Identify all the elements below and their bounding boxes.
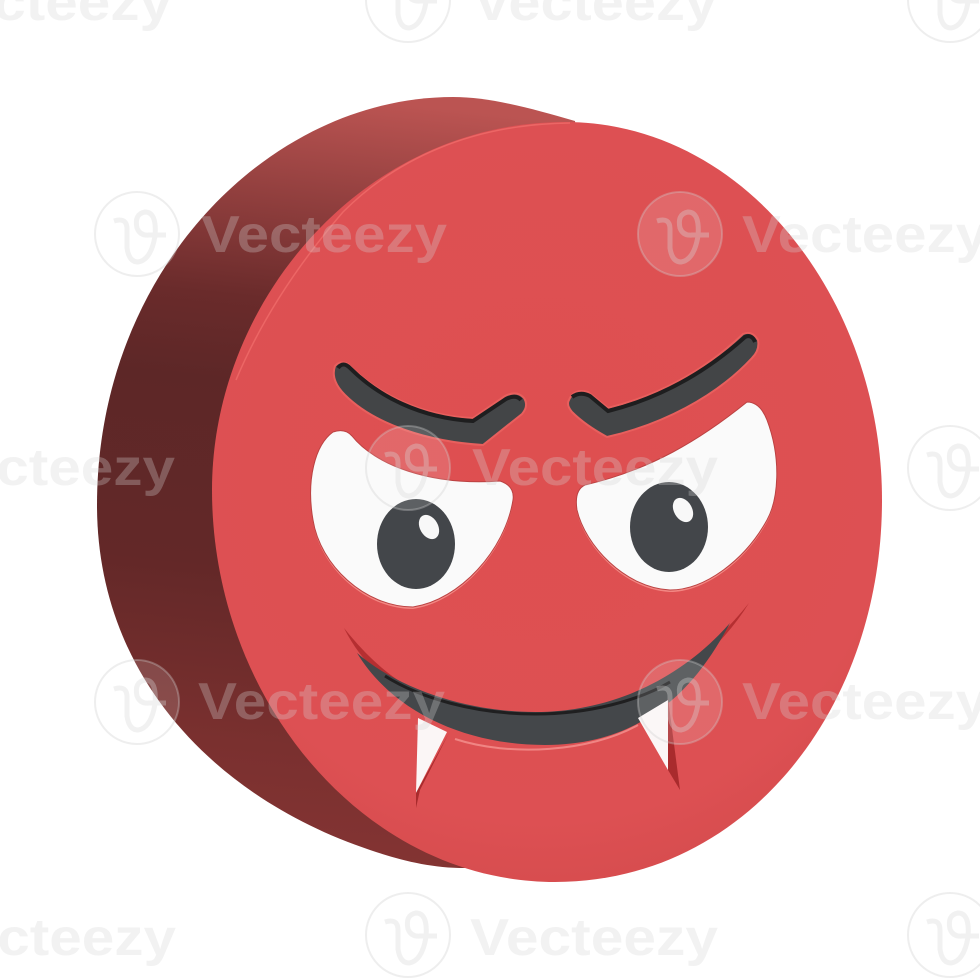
right eye [576,402,777,592]
right eyebrow [568,333,758,437]
watermarks: Vecteezy [470,909,718,967]
left eyebrow [334,362,526,445]
highlight [669,494,697,526]
pupil [377,499,455,589]
watermarks: Vecteezy [198,673,445,731]
right fang [638,700,668,770]
left eye [311,431,513,609]
watermarks: Vecteezy [742,673,980,731]
pupil [630,482,708,572]
coin side body [97,97,600,868]
front face [212,122,882,882]
watermarks: Vecteezy [201,206,447,264]
watermarks: Vecteezy [742,206,980,264]
mouth [344,603,749,808]
highlight [415,511,443,543]
left fang [416,718,447,793]
watermarks: Vecteezy [472,439,718,497]
